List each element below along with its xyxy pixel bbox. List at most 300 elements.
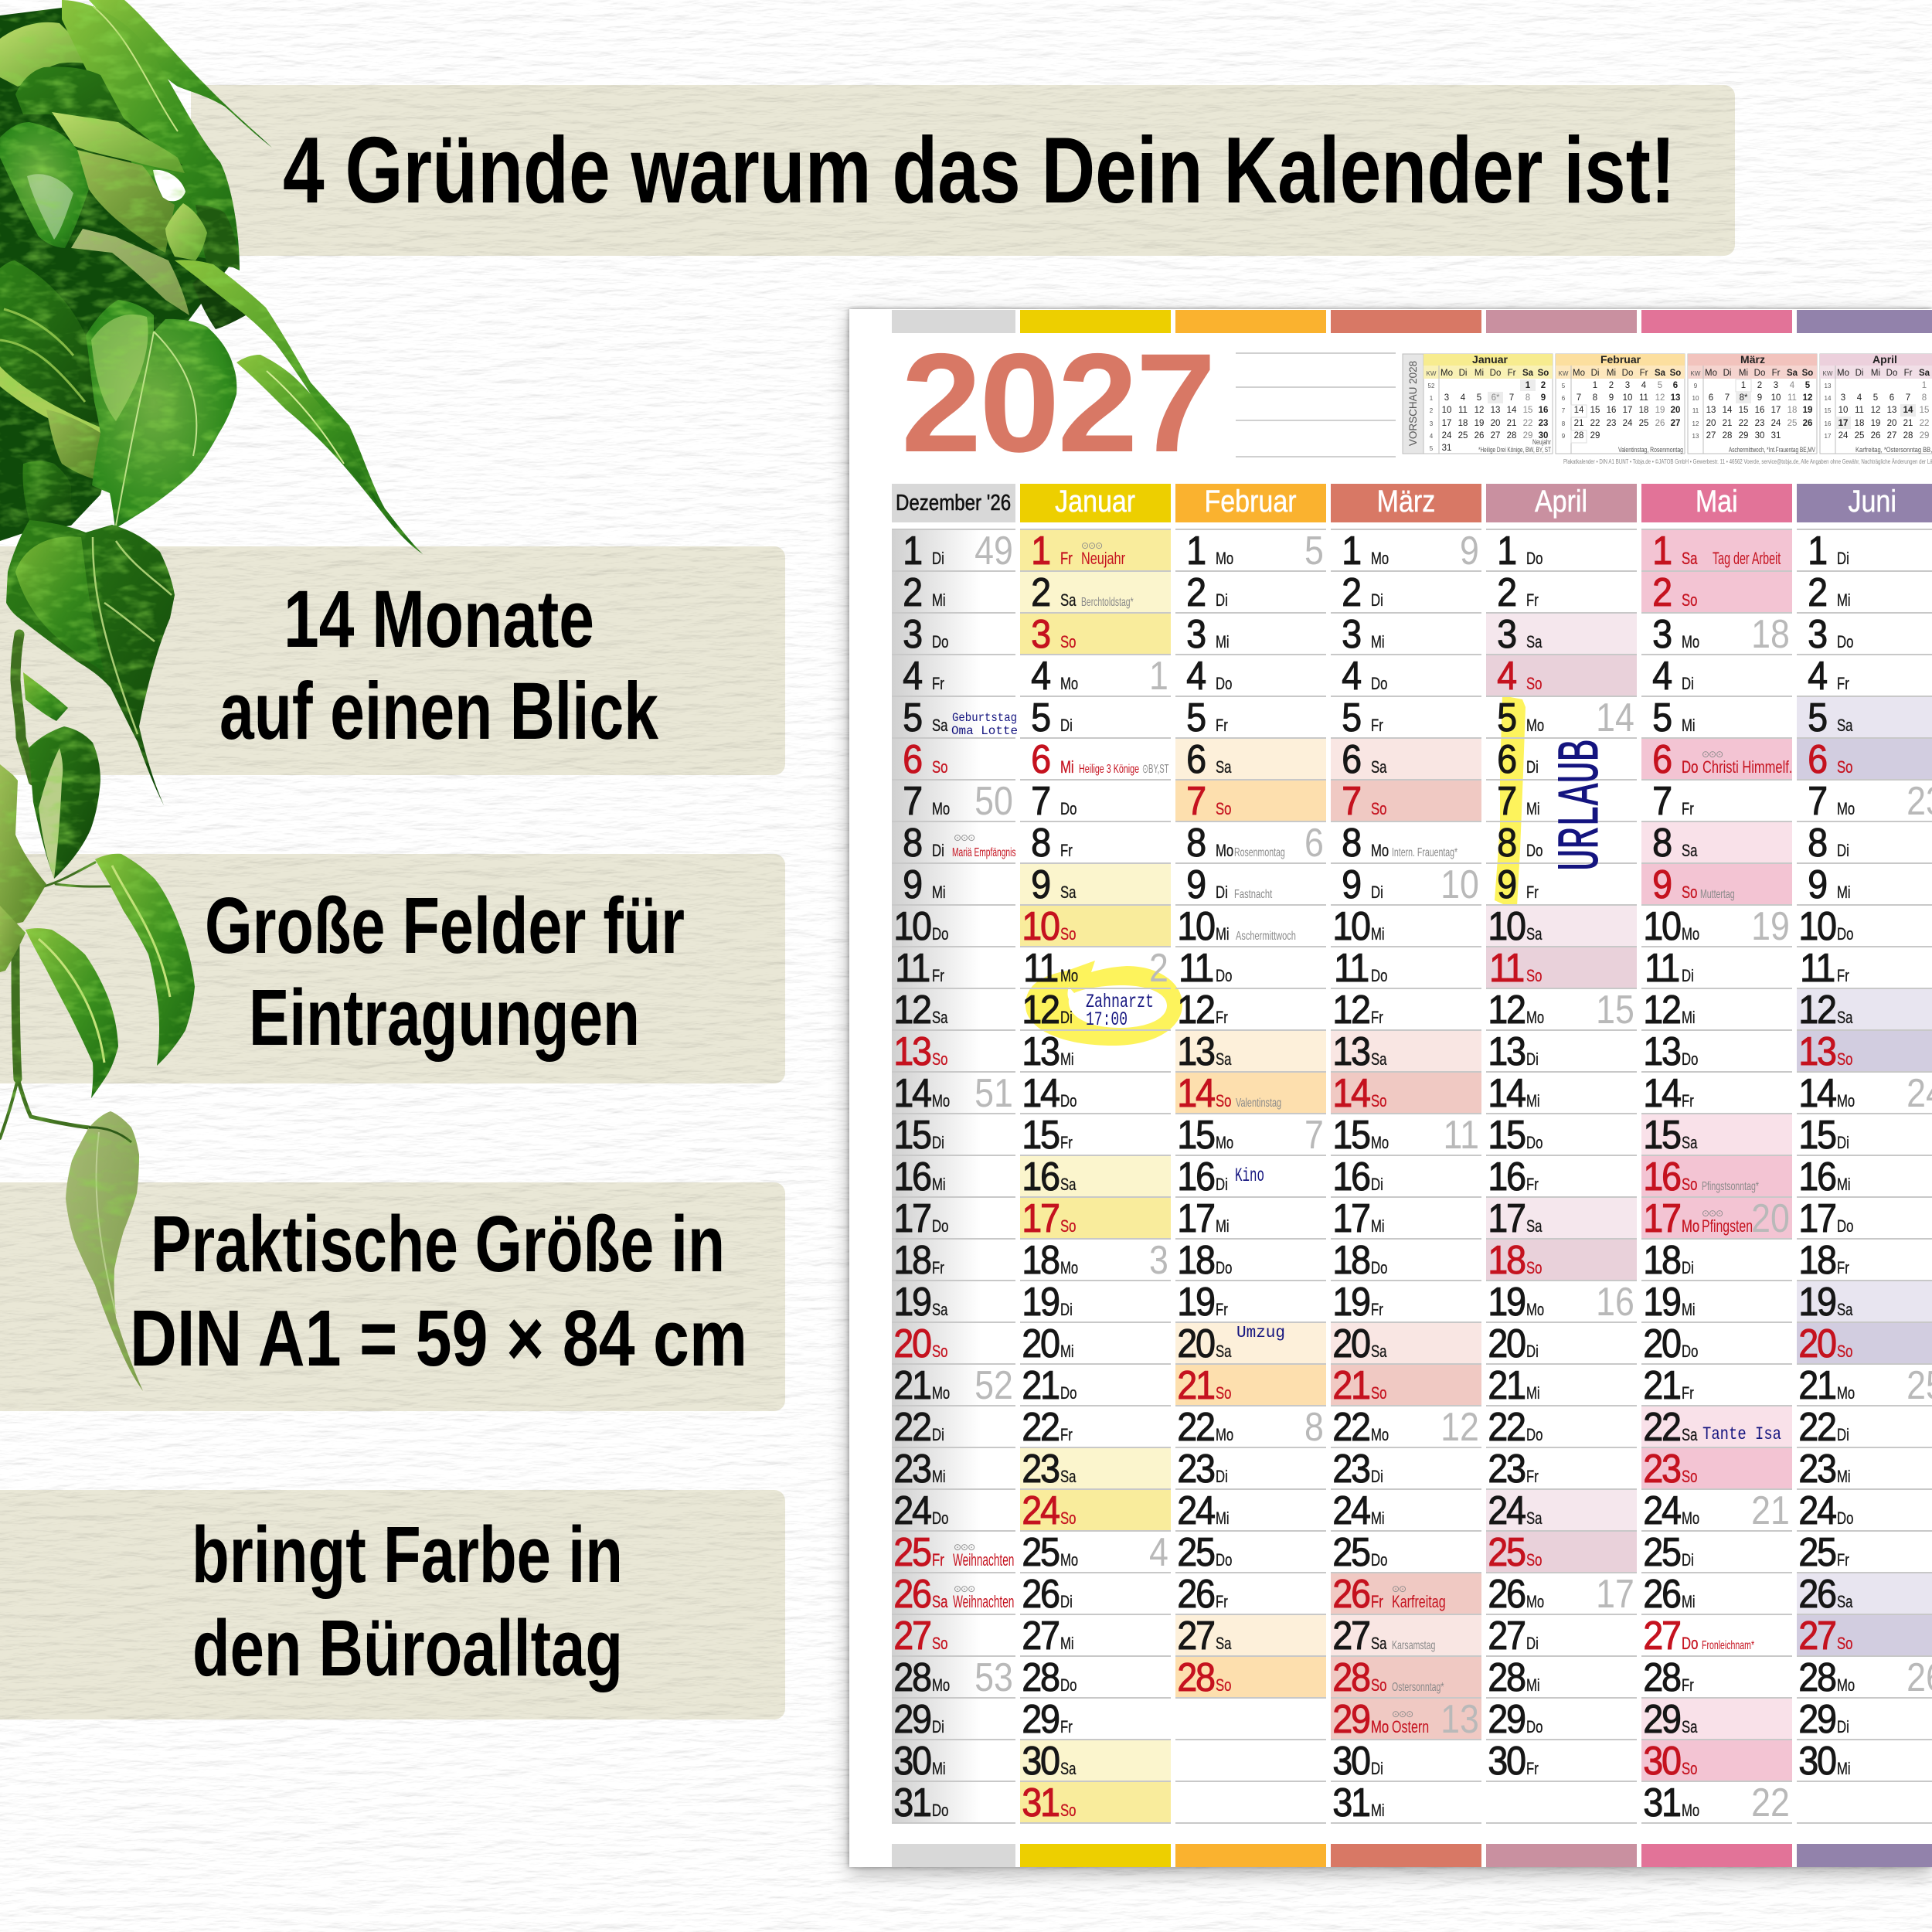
note: Umzug: Umzug <box>1236 1325 1285 1342</box>
day column: Mai: 31 <box>1643 1781 1680 1825</box>
day column: April: Sa <box>1526 1509 1542 1528</box>
day column: April: 21 <box>1488 1363 1525 1408</box>
day column: Mai: 6 <box>1652 737 1671 782</box>
day column: Februar: Do <box>1216 1258 1232 1277</box>
day column: Mai: Pfingsten <box>1702 1216 1753 1236</box>
day column: März: 30 <box>1332 1739 1369 1784</box>
day column: Mai: Sa <box>1682 1425 1697 1444</box>
day column: Februar: 14 <box>1177 1071 1214 1116</box>
mini calendar: März 2028: 14 <box>1723 406 1733 415</box>
day column: Dezember 2026: 25 <box>893 1530 930 1575</box>
day column: Januar: Fr <box>1060 549 1073 568</box>
mini calendar: Februar 2028: 21 <box>1574 419 1583 428</box>
day column: Januar: 4 <box>1031 654 1049 699</box>
day column: Januar: Di <box>1060 1592 1073 1611</box>
day column: Dezember 2026: Do <box>932 1509 948 1528</box>
day column: Januar: 13 <box>1022 1029 1059 1074</box>
mini calendar: Januar 2028: 13 <box>1491 406 1500 415</box>
mini calendar: März 2028: 6 <box>1709 393 1713 403</box>
day column: April: Mo <box>1526 716 1544 735</box>
day column: Mai: Fr <box>1682 799 1694 818</box>
day column: April: Fr <box>1526 1759 1539 1778</box>
day column: Januar: So <box>1060 924 1076 944</box>
day column: Dezember 2026: Mo <box>932 799 950 818</box>
day column: Juni: Sa <box>1837 1008 1852 1027</box>
mini calendar: Februar 2028: Di <box>1591 369 1599 378</box>
day column: März: 10 <box>1440 862 1479 907</box>
day column: Februar: Do <box>1216 1550 1232 1570</box>
day column: Juni: Do <box>1837 924 1853 944</box>
day column: Juni: So <box>1837 1342 1852 1361</box>
day column: März: 10 <box>1332 904 1369 949</box>
day column: Mai: 4 <box>1652 654 1671 699</box>
day column: Dezember 2026: 1 <box>903 529 921 573</box>
day column: Januar: 29 <box>1022 1697 1059 1742</box>
day column: Mai: 1 <box>1652 529 1671 573</box>
month header: März <box>1331 484 1481 522</box>
day column: Mai: 9 <box>1652 862 1671 907</box>
day column: Januar: So <box>1060 1216 1076 1236</box>
day column: Juni: 16 <box>1798 1155 1835 1199</box>
day column: Dezember 2026: 9 <box>903 862 921 907</box>
day column: Februar: 6 <box>1304 821 1324 866</box>
day column: April: Fr <box>1526 1467 1539 1486</box>
calendar poster <box>849 309 1932 1867</box>
day column: Juni: Sa <box>1837 716 1852 735</box>
day column: Mai: Sa <box>1682 549 1697 568</box>
day column: Mai: 23 <box>1643 1447 1680 1492</box>
day column: Februar: 18 <box>1177 1238 1214 1283</box>
mini calendar: Februar 2028: 1 <box>1593 381 1597 390</box>
day column: Januar: Do <box>1060 799 1077 818</box>
day column: Dezember 2026: 4 <box>903 654 921 699</box>
mini calendar: Februar 2028: 10 <box>1623 393 1632 403</box>
day column: Dezember 2026: 31 <box>893 1781 930 1825</box>
mini calendar: März 2028: 11 <box>1787 393 1797 403</box>
day column: Februar: Do <box>1216 674 1232 693</box>
day column: Dezember 2026: 8 <box>903 821 921 866</box>
day column: März: 19 <box>1332 1280 1369 1325</box>
day column: März: So <box>1371 1091 1386 1111</box>
reason 1 text: auf einen Blick <box>219 666 658 757</box>
mini calendar: Januar 2028: 2 <box>1430 407 1434 414</box>
day column: April: Mo <box>1526 1592 1544 1611</box>
day column: Januar: 18 <box>1022 1238 1059 1283</box>
mini calendar: April 2028: 21 <box>1903 419 1913 428</box>
day column: April: 14 <box>1596 696 1634 740</box>
day column: Mai: Di <box>1682 1258 1694 1277</box>
day column: Dezember 2026: 21 <box>893 1363 930 1408</box>
day column: April: 26 <box>1488 1572 1525 1617</box>
day column: Januar: 6 <box>1031 737 1049 782</box>
day column: März: Di <box>1371 883 1383 902</box>
day column: Juni: So <box>1837 1049 1852 1069</box>
mini calendar: Februar 2028: 14 <box>1574 406 1584 415</box>
mini calendar: März 2028: 9 <box>1757 393 1762 403</box>
day column: Dezember 2026: Weihnachten <box>953 1550 1014 1570</box>
day column: April: Fr <box>1526 883 1539 902</box>
mini calendar: April 2028: 24 <box>1838 431 1849 440</box>
day column: März: Mo <box>1371 1425 1389 1444</box>
day column: Dezember 2026: 20 <box>893 1321 930 1366</box>
mini calendar: Januar 2028: 19 <box>1475 419 1484 428</box>
day column: Januar: Di <box>1060 1008 1073 1027</box>
day column: April: 24 <box>1488 1488 1525 1533</box>
day column: Januar: Mo <box>1060 966 1078 985</box>
day column: Januar: Fr <box>1060 841 1073 860</box>
mini calendar: Januar 2028: 3 <box>1430 420 1434 427</box>
day column: Dezember 2026: 13 <box>893 1029 930 1074</box>
day column: Mai: Mo <box>1682 924 1699 944</box>
day column: Mai: 19 <box>1643 1280 1680 1325</box>
day column: Dezember 2026: 16 <box>893 1155 930 1199</box>
day column: März: Do <box>1371 674 1387 693</box>
day column: Juni: 2 <box>1808 570 1826 615</box>
day column: Februar: Fastnacht <box>1234 888 1272 901</box>
day column: Februar: Valentinstag <box>1236 1097 1281 1110</box>
mini calendar: März 2028: Fr <box>1772 369 1781 378</box>
mini calendar: Februar 2028: Valentinstag, Rosenmontag <box>1618 446 1683 454</box>
day column: Januar: Di <box>1060 716 1073 735</box>
day column: Juni: 5 <box>1808 696 1826 740</box>
day column: Juni: 30 <box>1798 1739 1835 1784</box>
day column: Dezember 2026: 50 <box>975 779 1013 824</box>
day column: Februar: Di <box>1216 590 1228 610</box>
day column: Februar: So <box>1216 799 1231 818</box>
day column: Juni: 23 <box>1798 1447 1835 1492</box>
day column: März: 13 <box>1332 1029 1369 1074</box>
day column: Juni: Di <box>1837 1717 1849 1736</box>
day column: Juni: So <box>1837 1634 1852 1653</box>
mini calendar: April 2028: 16 <box>1825 420 1832 427</box>
day column: Dezember 2026: Weihnachten <box>953 1592 1014 1611</box>
day column: Dezember 2026: Sa <box>932 1300 947 1319</box>
day column: März: Mo <box>1371 841 1389 860</box>
mini calendar: März 2028: 21 <box>1723 419 1732 428</box>
plant: leaf right middle <box>95 854 195 1066</box>
banner: reason 1 background <box>0 546 785 775</box>
mini calendar: Januar 2028: 17 <box>1442 419 1451 428</box>
banner: reason 3 background <box>0 1182 785 1411</box>
mini calendar: Februar 2028: 22 <box>1590 419 1600 428</box>
mini calendar: April 2028: 29 <box>1920 431 1929 440</box>
mini calendar: April 2028: 17 <box>1838 419 1848 428</box>
mini calendar: März 2028: 10 <box>1771 393 1781 403</box>
day column: Mai: ⊙⊙⊙ <box>1702 749 1723 760</box>
day column: Dezember 2026: 30 <box>893 1739 930 1784</box>
mini calendar: Januar 2028: 5 <box>1477 393 1481 403</box>
mini calendar: Januar 2028: So <box>1538 369 1549 378</box>
day column: Januar: 3 <box>1149 1238 1168 1283</box>
day column: Mai: 8 <box>1652 821 1671 866</box>
day column: Mai: So <box>1682 1175 1697 1194</box>
day column: Februar: 15 <box>1177 1113 1214 1158</box>
day column: Januar: So <box>1060 1509 1076 1528</box>
day column: Dezember 2026: Sa <box>932 1592 947 1611</box>
day column: Juni: 8 <box>1808 821 1826 866</box>
day column: April: Di <box>1526 1342 1539 1361</box>
day column: Februar: 24 <box>1177 1488 1214 1533</box>
mini calendar: Januar 2028: 5 <box>1430 445 1434 452</box>
preview side label <box>1403 354 1423 454</box>
day column: Dezember 2026: Mi <box>932 590 946 610</box>
mini calendar: April 2028: 27 <box>1887 431 1896 440</box>
plant: leaf lower middle <box>26 928 118 1098</box>
day column: April: 16 <box>1488 1155 1525 1199</box>
mini calendar: Februar 2028: 9 <box>1609 393 1614 403</box>
day column: Februar: 2 <box>1186 570 1205 615</box>
mini calendar: Januar 2028: 52 <box>1428 383 1435 389</box>
note: URLAUB: URLAUB <box>1549 740 1615 871</box>
day column: Juni: 24 <box>1798 1488 1835 1533</box>
day column: Juni: Mi <box>1837 590 1851 610</box>
month header: Februar: Februar <box>1205 485 1297 519</box>
day column: Januar: 24 <box>1022 1488 1059 1533</box>
day column: April: Di <box>1526 757 1539 777</box>
mini calendar: April 2028: Mo <box>1837 369 1849 378</box>
mini calendar: Januar 2028: 1 <box>1526 381 1531 390</box>
day column: März: Mo <box>1371 1133 1389 1152</box>
mini calendar: Februar 2028: 18 <box>1639 406 1648 415</box>
day column: März: 12 <box>1332 988 1369 1032</box>
month header: Juni <box>1797 484 1932 522</box>
mini calendar: April 2028: 15 <box>1825 407 1832 414</box>
mini calendar: April 2028: 25 <box>1855 431 1864 440</box>
day column: Mai: 14 <box>1643 1071 1680 1116</box>
mini calendar: März 2028: 17 <box>1771 406 1781 415</box>
day column: Februar: 6 <box>1186 737 1205 782</box>
day column: Januar: Sa <box>1060 1175 1076 1194</box>
mini calendar: Februar 2028: 6 <box>1673 381 1678 390</box>
mini calendar: Januar 2028: 24 <box>1442 431 1452 440</box>
day column: Juni: Fr <box>1837 1258 1849 1277</box>
day column: März: 11 <box>1444 1113 1479 1158</box>
month header: März: März <box>1377 485 1435 519</box>
day column: März: Mi <box>1371 924 1385 944</box>
mini calendar: März 2028: 18 <box>1787 406 1797 415</box>
day column: Juni: Do <box>1837 1509 1853 1528</box>
mini calendar: Januar 2028: 16 <box>1539 406 1548 415</box>
month header: Februar <box>1175 484 1326 522</box>
mini calendar: März 2028: 7 <box>1725 393 1730 403</box>
day column: März: 20 <box>1332 1321 1369 1366</box>
day column: April: 2 <box>1497 570 1515 615</box>
day column: März: 6 <box>1342 737 1360 782</box>
day column: April: 8 <box>1497 821 1515 866</box>
day column: Dezember 2026: 52 <box>975 1363 1013 1408</box>
mini calendar: März 2028: 20 <box>1706 419 1716 428</box>
mini calendar: März 2028: 9 <box>1694 383 1698 389</box>
day column: April: 29 <box>1488 1697 1525 1742</box>
day column: Januar: 25 <box>1022 1530 1059 1575</box>
day column: Mai: 21 <box>1643 1363 1680 1408</box>
day column: März: So <box>1371 799 1386 818</box>
month header: Mai: Mai <box>1696 485 1738 519</box>
day column: Mai: Do <box>1682 1634 1698 1653</box>
day column: Juni: 11 <box>1800 946 1834 991</box>
day column: Mai: Do <box>1682 757 1698 777</box>
mini calendar: April 2028: Di <box>1855 369 1863 378</box>
day column: Dezember 2026: 18 <box>893 1238 930 1283</box>
day column: Mai: Fr <box>1682 1675 1694 1695</box>
day column: März: Mo <box>1371 549 1389 568</box>
day column: Mai: Mi <box>1682 716 1696 735</box>
day column: Februar: So <box>1216 1383 1231 1403</box>
day column: März: Mi <box>1371 1509 1385 1528</box>
day column: Januar: 17 <box>1022 1196 1059 1241</box>
day column: Dezember 2026: Di <box>932 549 944 568</box>
reason 4 text: bringt Farbe in <box>192 1510 623 1599</box>
day column: Februar: Mo <box>1216 1133 1233 1152</box>
day column: März: So <box>1371 1675 1386 1695</box>
day column: Dezember 2026: So <box>932 1049 947 1069</box>
mini calendar: Februar 2028: Mo <box>1573 369 1585 378</box>
mini calendar: Februar 2028: 3 <box>1625 381 1630 390</box>
day column: März: 23 <box>1332 1447 1369 1492</box>
mini calendar: April 2028: 17 <box>1825 433 1832 440</box>
mini calendar: April 2028 <box>1820 353 1932 454</box>
day column: April: Di <box>1526 1634 1539 1653</box>
day column: März: Mo <box>1371 1717 1389 1736</box>
mini calendar: April 2028: Sa <box>1919 369 1930 378</box>
day column: Dezember 2026: Do <box>932 924 948 944</box>
mini calendar: April 2028: 3 <box>1841 393 1845 403</box>
day column: April: Do <box>1526 841 1543 860</box>
mini calendar: April 2028: 13 <box>1825 383 1832 389</box>
day column: Mai: Mo <box>1682 1801 1699 1820</box>
day column: Dezember 2026: Mi <box>932 883 946 902</box>
day column: März: 26 <box>1332 1572 1369 1617</box>
day column: Januar: 2 <box>1031 570 1049 615</box>
day column: April: Mi <box>1526 1383 1540 1403</box>
day column: März: 8 <box>1342 821 1360 866</box>
day column: Juni: 13 <box>1798 1029 1835 1074</box>
mini calendar: März 2028: 25 <box>1787 419 1797 428</box>
day column: Februar <box>1175 529 1326 1824</box>
day column: Januar: 11 <box>1023 946 1057 991</box>
day column: Mai: Do <box>1682 1049 1698 1069</box>
day column: Februar: 4 <box>1186 654 1205 699</box>
day column: April: 6 <box>1497 737 1515 782</box>
mini calendar: März 2028 <box>1688 353 1817 454</box>
month header: Januar: Januar <box>1056 485 1135 519</box>
note: Tante Isa: Tante Isa <box>1702 1424 1781 1444</box>
mini calendar: Februar 2028: 6 <box>1562 395 1566 402</box>
day column: Dezember 2026: 14 <box>893 1071 930 1116</box>
day column: Januar: So <box>1060 1801 1076 1820</box>
day column: März: Intern. Frauentag* <box>1392 846 1458 859</box>
day column: Februar: Mi <box>1216 632 1230 651</box>
day column: Mai: 3 <box>1652 612 1671 657</box>
day column: Juni: Di <box>1837 1133 1849 1152</box>
mini calendar: April 2028: 7 <box>1906 393 1910 403</box>
day column: Mai: 26 <box>1643 1572 1680 1617</box>
mini calendar: Januar 2028: 30 <box>1539 431 1548 440</box>
day column: Juni: Mo <box>1837 1675 1855 1695</box>
day column: März: Ostersonntag* <box>1392 1681 1444 1694</box>
day column: Juni: Fr <box>1837 674 1849 693</box>
note: Zahnarzt 17:00: Zahnarzt <box>1086 991 1154 1013</box>
note lines <box>1236 352 1396 457</box>
day column: März: Sa <box>1371 1634 1386 1653</box>
day column: Mai <box>1641 529 1792 1824</box>
mini calendar: März 2028: Di <box>1723 369 1731 378</box>
day column: Mai: 20 <box>1643 1321 1680 1366</box>
mini calendar: März 2028: 2 <box>1757 381 1762 390</box>
day column: Januar: 1 <box>1149 654 1168 699</box>
day column: Juni <box>1797 529 1932 1824</box>
day column: Mai: Christi Himmelf. <box>1702 757 1792 777</box>
mini calendar: Februar 2028: 17 <box>1623 406 1632 415</box>
day column: Mai: 30 <box>1643 1739 1680 1784</box>
mini calendar: Januar 2028: Mi <box>1475 369 1484 378</box>
mini calendar: Februar 2028: 28 <box>1574 431 1583 440</box>
day column: März: Fr <box>1371 1592 1383 1611</box>
day column: Juni: Do <box>1837 632 1853 651</box>
day column: Dezember 2026: 7 <box>903 779 921 824</box>
day column: Juni: Mo <box>1837 1091 1855 1111</box>
mini calendar: März 2028: 11 <box>1692 407 1699 414</box>
day column: März: 22 <box>1332 1405 1369 1450</box>
mini calendar: März 2028: Aschermittwoch, *Int.Frauentag BE,MV <box>1729 446 1815 454</box>
day column: Mai: 2 <box>1652 570 1671 615</box>
day column: April: Mo <box>1526 1300 1544 1319</box>
mini calendar: März 2028: 5 <box>1805 381 1811 390</box>
reason 1 text <box>219 574 658 757</box>
mini calendar: April 2028: KW <box>1823 370 1833 377</box>
mini calendar: März 2028: 30 <box>1755 431 1764 440</box>
mini calendar: Februar 2028: 2 <box>1609 381 1614 390</box>
day column: Februar: 8 <box>1186 821 1205 866</box>
day column: Mai: 12 <box>1643 988 1680 1032</box>
day column: Januar: Mo <box>1060 674 1078 693</box>
day column: Juni: 22 <box>1798 1405 1835 1450</box>
day column: Juni: Fr <box>1837 1550 1849 1570</box>
day column: Januar: 7 <box>1031 779 1049 824</box>
mini calendar: Januar 2028: 21 <box>1507 419 1516 428</box>
mini calendar: Februar 2028: 7 <box>1577 393 1581 403</box>
day column: Mai: Tag der Arbeit <box>1713 549 1781 568</box>
mini calendar: Januar 2028: Sa <box>1522 369 1534 378</box>
mini calendar: Februar 2028: 11 <box>1639 393 1648 403</box>
day column: April: 22 <box>1488 1405 1525 1450</box>
mini calendar: Januar 2028 <box>1423 353 1553 454</box>
mini calendar: Februar 2028: Februar <box>1600 353 1641 366</box>
day column: März: Mi <box>1371 1801 1385 1820</box>
day column: Februar: 10 <box>1177 904 1214 949</box>
day column: Februar: Sa <box>1216 757 1231 777</box>
mini calendar: Januar 2028: 23 <box>1539 419 1548 428</box>
day column: Dezember 2026: 12 <box>893 988 930 1032</box>
day column: Januar: Mo <box>1060 1258 1078 1277</box>
mini calendar: April 2028: 14 <box>1825 395 1832 402</box>
day column: Juni: Fr <box>1837 966 1849 985</box>
day column: März: 13 <box>1440 1697 1479 1742</box>
day column: Januar: Mi <box>1060 1634 1074 1653</box>
day column: Februar: So <box>1216 1675 1231 1695</box>
day column: Februar: Fr <box>1216 1008 1228 1027</box>
plant: upper foliage <box>0 0 423 805</box>
mini calendar: März 2028: Do <box>1754 369 1765 378</box>
day column: Februar: Mo <box>1216 1425 1233 1444</box>
day column: April: 27 <box>1488 1614 1525 1658</box>
day column: Dezember 2026: Do <box>932 632 948 651</box>
day column: Februar: Fr <box>1216 1300 1228 1319</box>
mini calendar: März 2028: Sa <box>1787 369 1798 378</box>
plant: hanging stem <box>0 634 114 1138</box>
day column: Dezember 2026: 53 <box>975 1655 1013 1700</box>
mini calendar: März 2028: 12 <box>1803 393 1812 403</box>
